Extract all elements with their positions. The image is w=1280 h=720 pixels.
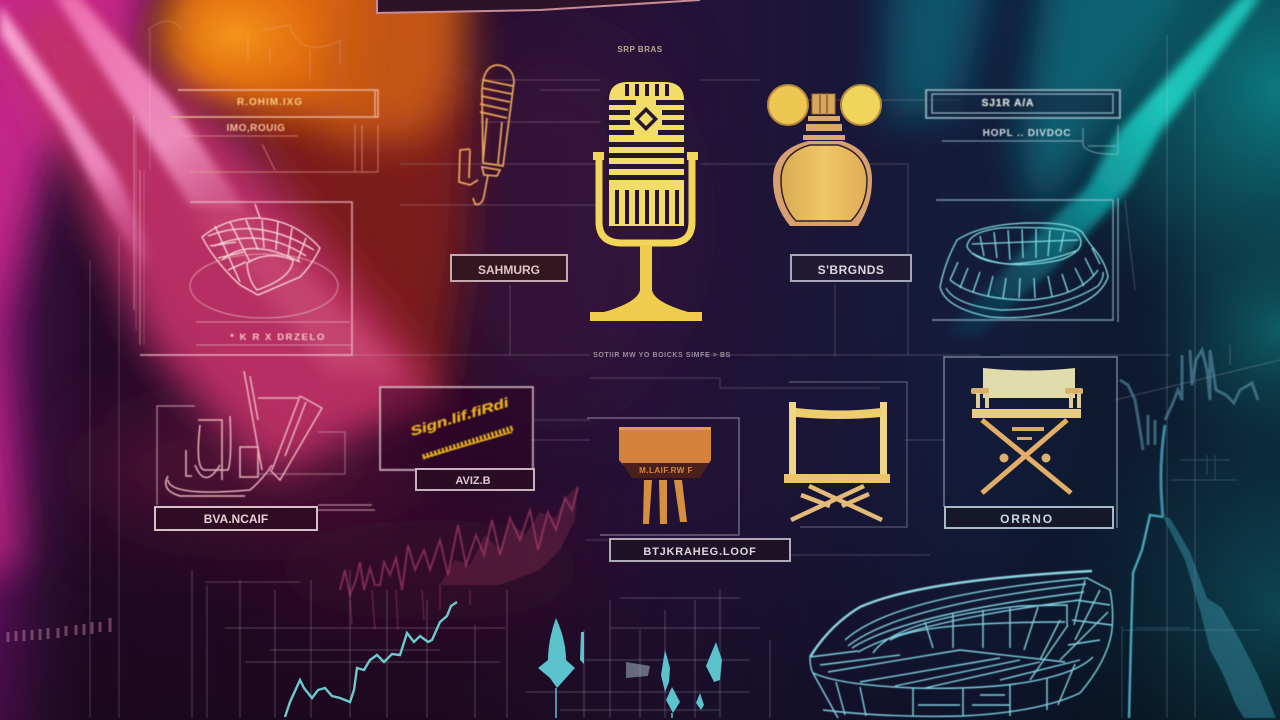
icon: stadium sketch bbox=[190, 204, 338, 318]
chart: right teal peak bbox=[1120, 350, 1276, 718]
label: bvancar: BVA.NCAIF bbox=[204, 512, 268, 526]
panel: left stadium bbox=[134, 115, 352, 355]
red lower glow bbox=[80, 405, 420, 535]
icon: oval stadium sketch bbox=[940, 223, 1108, 318]
pink beam bbox=[10, 0, 440, 475]
label: orno: ORRNO bbox=[1000, 512, 1054, 526]
panel: stool bbox=[587, 418, 739, 535]
orange beam bbox=[175, 0, 350, 120]
icon: large stadium wireframe bbox=[810, 571, 1113, 718]
icon: chairs sketch bbox=[166, 371, 322, 496]
label: stool caption bbox=[610, 539, 790, 561]
icon: vintage studio microphone bbox=[590, 82, 702, 321]
label: stool caption: BTJKRAHEG.LOOF bbox=[643, 546, 757, 558]
small center caption: SOTIIR MW YO BOICKS SIMFE > BS bbox=[593, 352, 731, 359]
mic head bbox=[609, 82, 684, 226]
red-brown glow bbox=[230, 80, 475, 410]
teal edge wash bbox=[1030, 0, 1280, 340]
label: scents bbox=[791, 255, 911, 281]
icon: stool bbox=[619, 427, 711, 524]
upper teal glow bbox=[885, 0, 1000, 120]
chart: teal glyphs bbox=[538, 618, 722, 718]
chart: teal line bbox=[285, 602, 457, 717]
panel: top right labels: HOPL .. DIVDOC bbox=[983, 128, 1071, 139]
secondary label: IMO,ROUIG bbox=[227, 123, 285, 134]
panel: signature bbox=[380, 387, 533, 470]
icon: stool: M.LAIF.RW F bbox=[639, 466, 693, 475]
panel: top right labels bbox=[926, 90, 1120, 154]
label: awards bbox=[416, 469, 534, 490]
label: awards: AVIZ.B bbox=[455, 475, 491, 487]
signature lettering: Sign.lif.fiRdi bbox=[408, 395, 511, 439]
chart: pink ticks trace bbox=[8, 618, 110, 642]
caption: * K R X DRZELO bbox=[230, 332, 326, 343]
center purple glow bbox=[430, 30, 690, 410]
heading: small top ornament: SRP BRAS bbox=[617, 45, 663, 54]
label: bvancar bbox=[155, 507, 317, 530]
teal streak bbox=[945, 0, 1262, 335]
chart: pink bars bbox=[340, 485, 578, 630]
label box bbox=[170, 90, 378, 117]
mic cradle bbox=[599, 155, 692, 243]
icon: director chair front bbox=[784, 382, 907, 527]
label: singing bbox=[451, 255, 567, 281]
label: orno bbox=[945, 507, 1113, 528]
orange beam outer bbox=[300, 0, 470, 140]
panel: top left labels bbox=[170, 90, 378, 172]
label text: R.OHIM.IXG bbox=[237, 97, 303, 108]
panel: top banner bbox=[377, 0, 700, 13]
mic stand bbox=[590, 245, 702, 321]
label: scents: S'BRGNDS bbox=[818, 263, 884, 277]
bottom-left chart grid bbox=[192, 570, 770, 718]
panel: director chair right bbox=[944, 357, 1117, 528]
icon: director chair bbox=[971, 368, 1083, 493]
icon: perfume bottle bbox=[768, 85, 881, 226]
panel: lower left sketch bbox=[157, 371, 375, 510]
teal lower wash bbox=[1050, 380, 1280, 720]
left magenta wash bbox=[0, 0, 165, 620]
panel: top right labels: SJ1R A/A bbox=[982, 98, 1034, 109]
pink bright streaks bbox=[0, 5, 150, 275]
panel: right stadium bbox=[932, 198, 1118, 322]
icon: handheld microphone bbox=[459, 65, 514, 204]
label: singing: SAHMURG bbox=[478, 263, 540, 277]
